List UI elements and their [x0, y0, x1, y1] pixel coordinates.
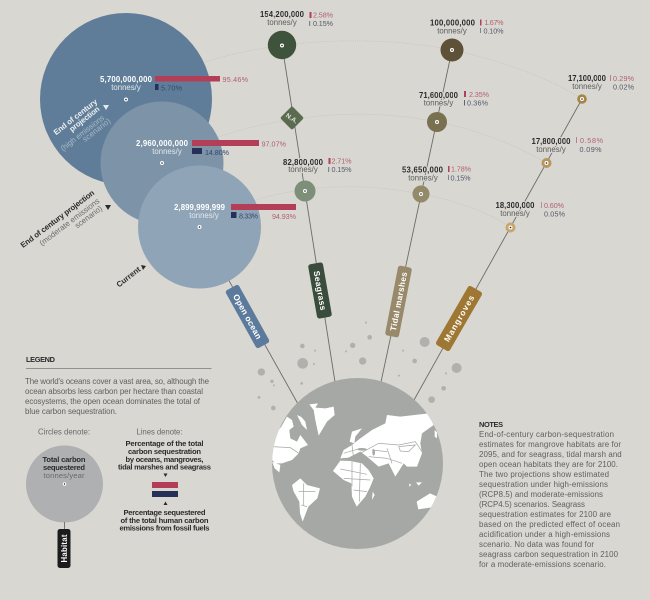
notes body	[479, 430, 622, 569]
notes body: scenario. No data was found for	[479, 540, 594, 549]
open ocean high value	[100, 75, 249, 92]
legend: lines denote: Percentage of the total	[126, 439, 204, 448]
mangrove moderate values	[532, 136, 604, 154]
habitat label: mangroves: Mangroves	[442, 293, 476, 344]
open ocean moderate value: 2,960,000,000	[136, 139, 189, 148]
legend description: The world's oceans cover a vast area, so, although the	[25, 377, 210, 386]
legend description	[25, 377, 210, 416]
seagrass high values: 154,200,000	[260, 10, 305, 19]
label: moderate emissions projection: (moderate emissions	[38, 196, 101, 248]
panel: seagrass series	[260, 10, 352, 202]
seagrass current values	[283, 156, 352, 174]
mangrove current values	[496, 201, 566, 218]
tidal marsh high values	[430, 18, 504, 36]
open ocean moderate value: 14.80%	[205, 148, 230, 157]
notes body: sequestration under high-emissions	[479, 480, 608, 489]
mangrove moderate values: 0.09%	[580, 145, 602, 154]
seagrass high values: 0.15%	[313, 19, 334, 28]
tidal marsh high values: 1.67%	[484, 18, 504, 27]
habitat label: seagrass	[308, 262, 332, 319]
tidal marsh high values: 0.10%	[484, 26, 504, 36]
mangrove moderate values: tonnes/y	[536, 145, 566, 154]
seagrass high values: tonnes/y	[267, 18, 297, 27]
label: high emissions projection	[52, 97, 113, 153]
decorative carbon particles	[258, 322, 462, 410]
open ocean current value: 2,899,999,999	[174, 203, 226, 212]
legend: lines denote: emissions from fossil fuels	[120, 524, 210, 532]
label: high emissions projection: projection	[68, 104, 102, 134]
legend description: blue carbon sequestration.	[25, 407, 117, 416]
seagrass current values: tonnes/y	[288, 165, 318, 174]
circle: high emissions projection	[40, 13, 212, 185]
seagrass high values	[260, 10, 334, 28]
marker: seagrass no data	[280, 106, 304, 130]
notes body: 2095, and for seagrass, tidal marsh and	[479, 450, 622, 459]
legend: circles denote: tonnes/year	[44, 471, 85, 480]
label: high emissions projection: scenario)	[81, 116, 113, 144]
circle: seagrass current	[294, 180, 316, 202]
notes body: estimates for mangrove habitats are for	[479, 440, 621, 449]
legend: lines denote: of the total human carbon	[120, 516, 209, 525]
panel: notes	[479, 420, 622, 569]
label: high emissions projection: (high emissions	[59, 113, 106, 153]
label: high emissions projection: End of century	[52, 97, 100, 137]
globe with world map	[272, 378, 443, 549]
mangrove current values: tonnes/y	[500, 209, 530, 218]
habitat label: tidal marshes	[385, 265, 412, 338]
open ocean current value	[174, 203, 297, 221]
seagrass current values: 82,800,000	[283, 158, 324, 167]
notes heading: NOTES	[479, 420, 503, 429]
mangrove high values: 0.02%	[613, 82, 635, 92]
notes body: The two projections show estimated	[479, 470, 609, 479]
legend: lines denote: tidal marshes and seagrass	[118, 462, 211, 472]
mangrove high values: 0.29%	[613, 74, 635, 83]
seagrass high values: 2.58%	[313, 10, 334, 20]
label: moderate emissions projection: scenario)	[73, 204, 104, 230]
open ocean current value: 94.93%	[272, 212, 297, 221]
open ocean moderate value: 97.07%	[262, 140, 287, 148]
tidal marsh current values	[402, 164, 472, 182]
notes body: acidification under a high-emissions	[479, 530, 610, 539]
tidal marsh current values: 0.15%	[450, 174, 471, 182]
legend: circles denote: sequestered	[43, 463, 85, 472]
panel: tidal marsh series	[402, 18, 504, 202]
habitat connector lines	[199, 45, 582, 404]
legend description: ecosystems, the open ocean dominates the total of	[25, 397, 201, 406]
legend: lines denote: by oceans, mangroves,	[126, 455, 204, 464]
notes body: End-of-century carbon-sequestration	[479, 430, 614, 439]
tidal marsh moderate values: 2.35%	[469, 90, 490, 99]
tidal marsh moderate values: tonnes/y	[424, 98, 453, 108]
legend: circles denote	[26, 428, 103, 568]
open ocean moderate value: tonnes/y	[152, 147, 182, 156]
panel: mangrove series	[496, 74, 635, 232]
circle: moderate emissions projection	[100, 102, 224, 224]
tidal marsh current values: 1.78%	[451, 164, 472, 174]
legend: lines denote: Lines denote:	[136, 428, 182, 436]
circle: tidal marsh high	[440, 38, 464, 62]
open ocean high value: 5,700,000,000	[100, 75, 153, 84]
tidal marsh high values: 100,000,000	[430, 18, 476, 28]
label: current: Current	[115, 265, 143, 289]
mangrove moderate values: 0.58%	[580, 136, 604, 145]
notes body: (RCP4.5) scenarios. Seagrass	[479, 500, 585, 509]
dotted arcs linking scenarios	[205, 41, 582, 227]
legend: circles denote: Total carbon	[42, 455, 86, 464]
open ocean current value: 8.33%	[239, 212, 259, 220]
legend: circles denote: Habitat	[60, 534, 69, 562]
mangrove high values: tonnes/y	[572, 82, 602, 91]
notes body: seagrass carbon sequestration in 2100	[479, 550, 619, 559]
legend: lines denote	[118, 428, 211, 532]
tidal marsh current values: tonnes/y	[408, 174, 438, 182]
legend: circles denote: Circles denote:	[38, 428, 90, 436]
tidal marsh moderate values: 0.36%	[467, 98, 489, 108]
panel: legend	[25, 355, 212, 568]
mangrove moderate values: 17,800,000	[532, 137, 571, 146]
habitat label: open ocean	[225, 284, 270, 349]
open ocean high value: 95.46%	[222, 75, 249, 84]
tidal marsh moderate values: 71,600,000	[419, 91, 459, 100]
legend description: ocean absorbs less carbon per hectare than coastal	[25, 387, 203, 396]
mangrove high values	[568, 74, 635, 92]
panel: open ocean circles	[40, 13, 297, 288]
circle: mangrove high	[577, 94, 587, 104]
tidal marsh moderate values	[419, 90, 490, 108]
open ocean current value: tonnes/y	[189, 211, 219, 220]
open ocean high value: tonnes/y	[111, 83, 141, 92]
habitat label: tidal marshes: Tidal marshes	[388, 271, 409, 332]
tidal marsh current values: 53,650,000	[402, 166, 444, 174]
notes body: (RCP8.5) and moderate-emissions	[479, 490, 603, 499]
legend heading: LEGEND	[26, 355, 56, 364]
notes body: for a moderate-emissions scenario.	[479, 560, 606, 569]
legend: lines denote: Percentage sequestered	[124, 508, 206, 517]
seagrass current values: 0.15%	[332, 165, 352, 174]
circle: tidal marsh moderate	[427, 112, 447, 132]
circle: tidal marsh current	[412, 186, 430, 202]
mangrove current values: 0.05%	[544, 210, 566, 218]
seagrass current values: 2.71%	[332, 156, 352, 166]
notes body: based on the predicted effect of ocean	[479, 520, 620, 529]
mangrove current values: 18,300,000	[496, 201, 535, 210]
habitat label: open ocean: Open ocean	[231, 292, 264, 341]
circle: seagrass high	[268, 31, 296, 59]
marker: seagrass no data: N.A.	[284, 112, 299, 126]
open ocean moderate value	[136, 139, 287, 157]
mangrove current values: 0.60%	[544, 201, 565, 210]
legend: lines denote: carbon sequestration	[128, 447, 201, 456]
open ocean high value: 5.70%	[161, 84, 183, 92]
tidal marsh high values: tonnes/y	[437, 26, 467, 36]
notes body: sequestration estimates for 2100 are	[479, 510, 612, 519]
label: moderate emissions projection: End of century projection	[19, 188, 96, 250]
circle: mangrove moderate	[542, 158, 552, 168]
notes body: open ocean habitats they are for 2100.	[479, 460, 618, 469]
mangrove high values: 17,100,000	[568, 74, 607, 83]
habitat label: seagrass: Seagrass	[312, 270, 328, 311]
habitat label: mangroves	[435, 285, 483, 352]
circle centre dots	[124, 44, 584, 230]
circle: mangrove current	[506, 222, 516, 232]
circle: current	[138, 166, 261, 288]
